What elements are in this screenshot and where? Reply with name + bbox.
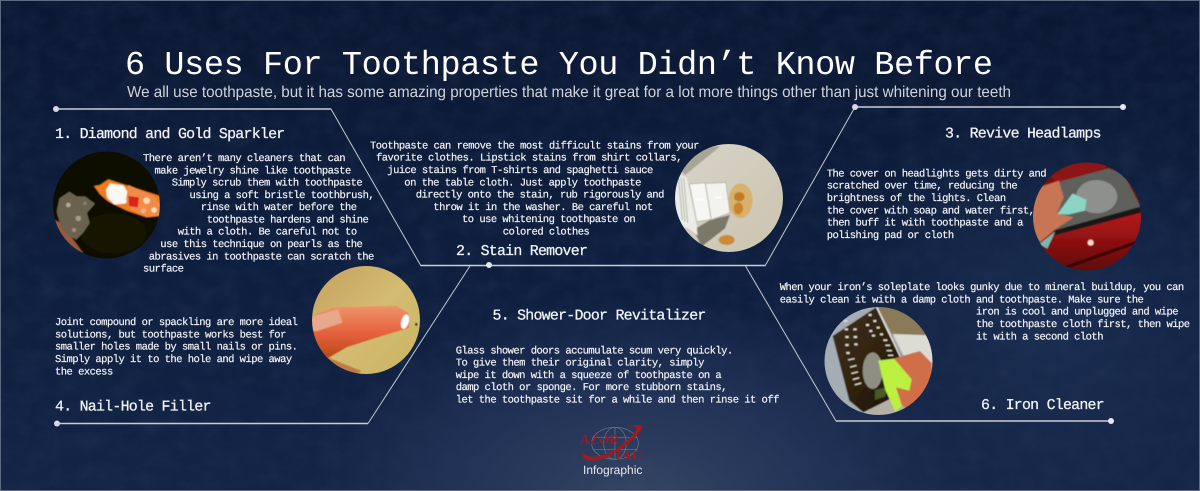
body text 1: with a cloth. Be careful not to [178, 227, 357, 239]
logo: wordmark: TAC [614, 449, 642, 464]
body text 1: There aren’t many cleaners that can [143, 153, 345, 165]
logo: infographic label: Infographic [583, 463, 642, 477]
body text 6 [780, 282, 1190, 343]
icon: finger with toothpaste [310, 265, 423, 378]
heading 4: 4. Nail-Hole Filler [55, 400, 211, 416]
connector: centre line with dot [421, 262, 765, 268]
heading 3: 3. Revive Headlamps [945, 127, 1101, 143]
title: 6 Uses For Toothpaste You Didn’t Know Before [125, 47, 993, 85]
body text 4 [55, 317, 298, 378]
body text 3: brightness of the lights. Clean [827, 193, 1006, 205]
body text 6: easily clean it with a damp cloth and toothpaste. Make sure the [780, 294, 1144, 306]
heading 1: 1. Diamond and Gold Sparkler [55, 127, 284, 143]
logo [580, 425, 642, 477]
body text 1: using a soft bristle toothbrush, [190, 190, 374, 202]
panel: 1 diamond and gold sparkler [50, 127, 374, 276]
body text 2: directly onto the stain, rub rigorously and [416, 190, 664, 202]
body text 5: Glass shower doors accumulate scum very quickly. [456, 345, 733, 357]
body text 6: it with a second cloth [976, 331, 1103, 343]
body text 4: smaller holes made by small nails or pins. [55, 342, 297, 354]
body text 2: to use whitening toothpaste on [462, 214, 635, 226]
body text 2: on the table cloth. Just apply toothpaste [404, 177, 641, 189]
body text 3: then buff it with toothpaste and a [827, 218, 1023, 230]
connector: top right line [765, 104, 1126, 266]
icon: iron soleplate being cleaned [823, 305, 937, 418]
body text 1: surface [143, 264, 184, 276]
body text 1: rinse with water before the [201, 202, 357, 214]
body text 5: wipe it down with a squeeze of toothpaste on a [456, 370, 721, 382]
body text 1: use this technique on pearls as the [160, 239, 363, 251]
logo: swoosh [582, 425, 642, 461]
heading 2: 2. Stain Remover [456, 244, 587, 260]
icon: jewellery photo [53, 152, 160, 258]
connector: bottom left line [54, 266, 470, 426]
body text 1: toothpaste hardens and shine [207, 214, 369, 226]
body text 2: juice stains from T-shirts and spaghetti sauce [387, 165, 653, 177]
panel: 2 stain remover [370, 140, 787, 260]
icon: headlamp being polished [1033, 162, 1141, 270]
body text 5 [456, 345, 779, 406]
body text 6: the toothpaste cloth first, then wipe [976, 319, 1190, 331]
body text 6: iron is cool and unplugged and wipe [976, 307, 1178, 319]
panel: 4 nail-hole filler [55, 265, 423, 416]
body text 1: abrasives in toothpaste can scratch the [149, 251, 374, 263]
panel: 6 iron cleaner [780, 282, 1190, 418]
body text 6: When your iron’s soleplate looks gunky due to mineral buildup, you can [780, 282, 1184, 294]
body text 3: the cover with soap and water first, [827, 205, 1034, 217]
body text 1: make jewelry shine like toothpaste [154, 165, 351, 177]
body text 4: Simply apply it to the hole and wipe away [55, 354, 292, 366]
body text 1: Simply scrub them with toothpaste [172, 178, 362, 190]
icon: toothpaste tube on stained cloth [675, 144, 783, 252]
body text 2: colored clothes [503, 226, 589, 238]
panel: 5 shower-door revitalizer [456, 308, 779, 406]
body text 1 [143, 153, 374, 276]
logo: globe [592, 427, 638, 459]
heading 6: 6. Iron Cleaner [981, 398, 1104, 414]
body text 3: scratched over time, reducing the [827, 181, 1017, 193]
body text 4: Joint compound or spackling are more ideal [55, 317, 298, 329]
body text 3: The cover on headlights gets dirty and [827, 168, 1046, 180]
body text 4: solutions, but toothpaste works best for [55, 329, 286, 341]
body text 2 [370, 140, 699, 238]
connector: bottom right line [746, 266, 1114, 424]
body text 2: favorite clothes. Lipstick stains from shirt collars, [376, 153, 682, 165]
subtitle: We all use toothpaste, but it has some amazing properties that make it great for a lot more things other than just whitening our teeth [127, 84, 1011, 101]
heading 5: 5. Shower-Door Revitalizer [492, 308, 706, 324]
body text 2: throw it in the washer. Be careful not [433, 202, 653, 214]
connector: top left line [53, 106, 421, 266]
body text 4: the excess [55, 366, 113, 378]
body text 5: To give them their original clarity, simply [456, 358, 704, 370]
logo: wordmark [580, 433, 642, 464]
body text 3: polishing pad or cloth [827, 230, 954, 242]
logo: wordmark: AZƏR [580, 433, 620, 448]
body text 3 [827, 168, 1046, 242]
body text 5: let the toothpaste sit for a while and then rinse it off [456, 394, 779, 406]
panel: 3 revive headlamps [827, 127, 1143, 275]
body text 2: Toothpaste can remove the most difficult stains from your [370, 140, 699, 152]
body text 5: damp cloth or sponge. For more stubborn stains, [456, 382, 727, 394]
